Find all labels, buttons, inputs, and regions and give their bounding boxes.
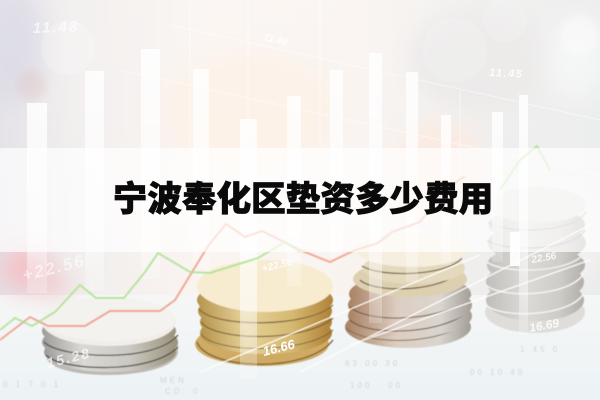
floating value labels: 15.28 bbox=[45, 344, 92, 371]
title band bbox=[0, 148, 600, 252]
diagonal light streaks bbox=[200, 225, 590, 372]
floating value labels: 16.66 bbox=[261, 336, 297, 359]
title: 宁波奉化区垫资多少费用 bbox=[113, 181, 493, 219]
floating value labels: +22.56 bbox=[261, 257, 294, 275]
white vertical chart bars bbox=[27, 49, 528, 379]
coin stack: grey bbox=[485, 187, 586, 333]
floating value labels: +22.56 bbox=[20, 251, 88, 285]
bokeh circles bbox=[17, 0, 600, 100]
floor table figures: CD: 0 bbox=[165, 387, 200, 396]
coin stack: silver bbox=[42, 297, 178, 375]
floor table figures: MEN bbox=[160, 376, 187, 385]
floor table figures: 1 45 0 bbox=[520, 345, 560, 354]
coin stack: gold bbox=[195, 260, 333, 366]
line chart: green trend bbox=[0, 146, 550, 330]
floor table figures: 0 1 7 0 1 bbox=[3, 380, 61, 389]
line chart: red trend bbox=[0, 176, 465, 340]
floor table figures: 63.00 30 bbox=[345, 359, 400, 368]
highlight bar on grey stack bbox=[510, 232, 520, 266]
floor table figures: 00 10 40 bbox=[470, 368, 525, 377]
floating value labels: 11.45 bbox=[489, 67, 524, 81]
floor table figures bbox=[3, 345, 560, 396]
floor table figures: 100 . 00 bbox=[350, 381, 403, 390]
chart grid lines bbox=[120, 0, 600, 250]
floating value labels: 16.69 bbox=[528, 316, 560, 335]
floating value labels: 11.48 bbox=[33, 18, 80, 37]
coin stack: bronze and gold bbox=[345, 233, 472, 348]
floating value labels bbox=[20, 18, 560, 371]
floating value labels: 22.56 bbox=[530, 251, 558, 266]
floating value labels: 11.48 bbox=[262, 32, 289, 49]
